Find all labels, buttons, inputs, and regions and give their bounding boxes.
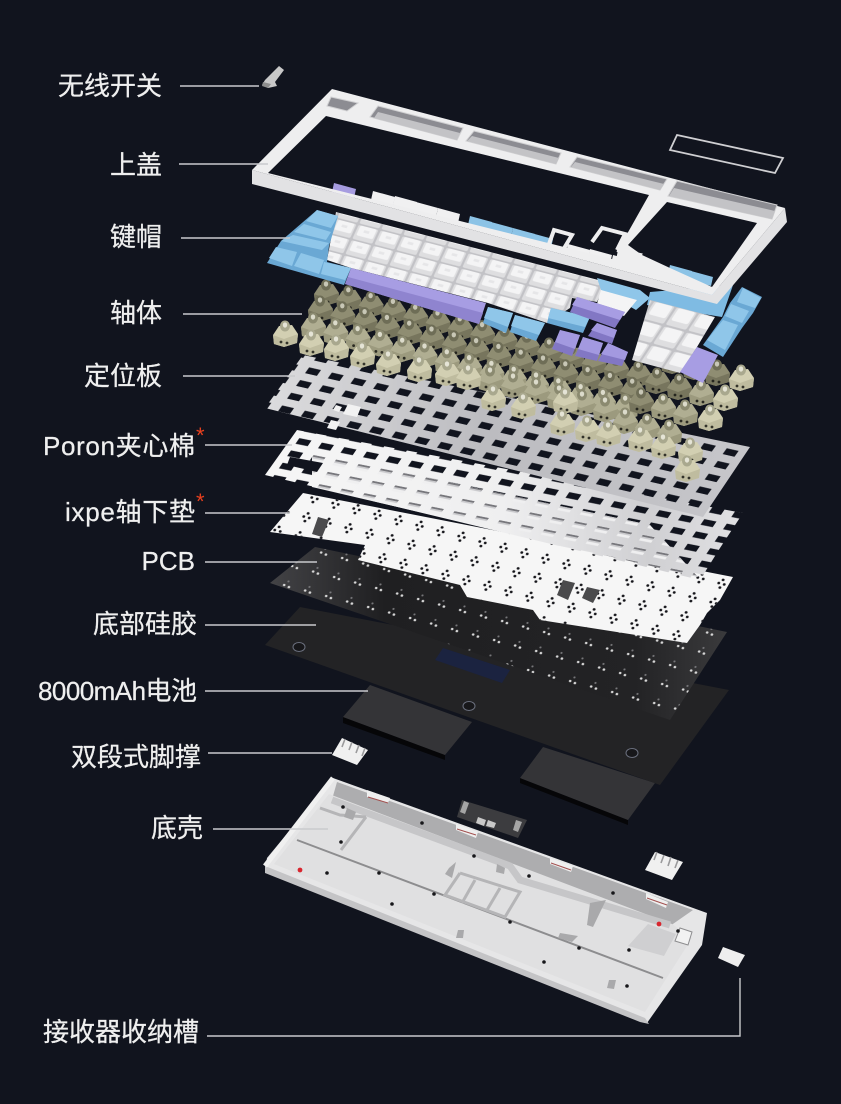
label: PCB: PCB — [142, 546, 195, 576]
case wall clips — [367, 790, 668, 908]
label: poron foam: Poron夹心棉 — [43, 431, 195, 461]
space bar — [345, 268, 486, 324]
frame notch bridges — [549, 228, 640, 272]
plate holes showing white foam — [327, 404, 361, 430]
label: switches: 轴体 — [110, 298, 162, 328]
case front edge — [265, 866, 649, 1024]
small screen bezel — [670, 135, 783, 173]
case back wall — [333, 782, 693, 926]
label: plate: 定位板 — [84, 361, 162, 391]
ixpe cut-outs — [312, 517, 600, 603]
numpad blue keys — [707, 288, 761, 350]
label: poron foam: * — [196, 423, 205, 448]
third switch row — [301, 312, 638, 420]
second switch row — [308, 296, 645, 403]
label: battery: 8000mAh电池 — [38, 676, 197, 706]
label: keycaps: 键帽 — [110, 222, 162, 252]
receiver slot leader line — [207, 978, 740, 1036]
top cover frame — [252, 89, 787, 304]
numpad white keys — [632, 300, 715, 373]
icon: electronics module — [457, 800, 527, 838]
icon: foot stand right — [645, 852, 683, 880]
icon: receiver — [718, 947, 745, 967]
ixpe upper part seen through the foam — [312, 453, 698, 577]
purple key long — [570, 297, 625, 328]
white enter key — [597, 290, 637, 316]
blue keys bottom row — [483, 307, 590, 341]
numpad blue band — [647, 285, 733, 317]
case right recess — [628, 924, 676, 956]
blue keys behind enter — [597, 278, 650, 310]
case back ridge — [332, 800, 670, 925]
case floor — [274, 794, 692, 1012]
silicone rings — [293, 642, 638, 758]
frame front face — [252, 170, 787, 304]
label: receiver slot: 接收器收纳槽 — [43, 1017, 199, 1047]
case rim highlight — [265, 778, 333, 866]
icon: wireless switch — [262, 66, 284, 88]
label: poron foam — [43, 423, 292, 461]
case red markers — [298, 868, 661, 926]
battery cell left — [343, 685, 472, 760]
label: ixpe pad: ixpe轴下垫 — [65, 497, 195, 527]
label: top cover: 上盖 — [110, 150, 162, 180]
top row keys behind frame — [331, 183, 713, 290]
label: foot stand: 双段式脚撑 — [71, 742, 201, 772]
label: wireless switch: 无线开关 — [58, 71, 162, 101]
case screw holes — [325, 805, 680, 988]
foot stand left — [332, 738, 368, 765]
case left inner recess — [320, 808, 520, 917]
poron long slot — [287, 457, 323, 472]
blue keys left — [269, 210, 351, 280]
PCB — [270, 547, 727, 720]
label: ixpe pad: * — [196, 489, 205, 514]
blue key block backing — [267, 210, 351, 285]
label: bottom case: 底壳 — [151, 813, 203, 843]
switches — [273, 280, 754, 482]
label: bottom silicone: 底部硅胶 — [93, 609, 197, 639]
frame window highlights — [374, 112, 775, 219]
back switch rows — [314, 280, 651, 387]
numpad switches — [613, 348, 754, 446]
frame recessed windows — [327, 97, 777, 219]
case floor groove — [297, 840, 663, 978]
bottom case — [265, 778, 707, 1024]
case posts — [344, 808, 616, 989]
ixpe pad — [270, 453, 733, 643]
front row switches — [273, 320, 703, 482]
frame top face — [252, 89, 785, 295]
bottom silicone — [265, 607, 729, 785]
poron foam — [265, 430, 743, 580]
positioning plate — [265, 355, 750, 517]
fourth switch row right part — [478, 366, 618, 422]
battery cell right — [520, 747, 655, 825]
case outer body — [265, 778, 707, 1023]
main white keys — [327, 212, 606, 323]
keycaps — [267, 183, 762, 383]
label: ixpe pad — [65, 489, 290, 527]
arrow keys — [552, 323, 628, 366]
numpad enter key — [680, 347, 718, 383]
silicone window — [435, 648, 510, 683]
numpad blue backing — [703, 287, 762, 357]
